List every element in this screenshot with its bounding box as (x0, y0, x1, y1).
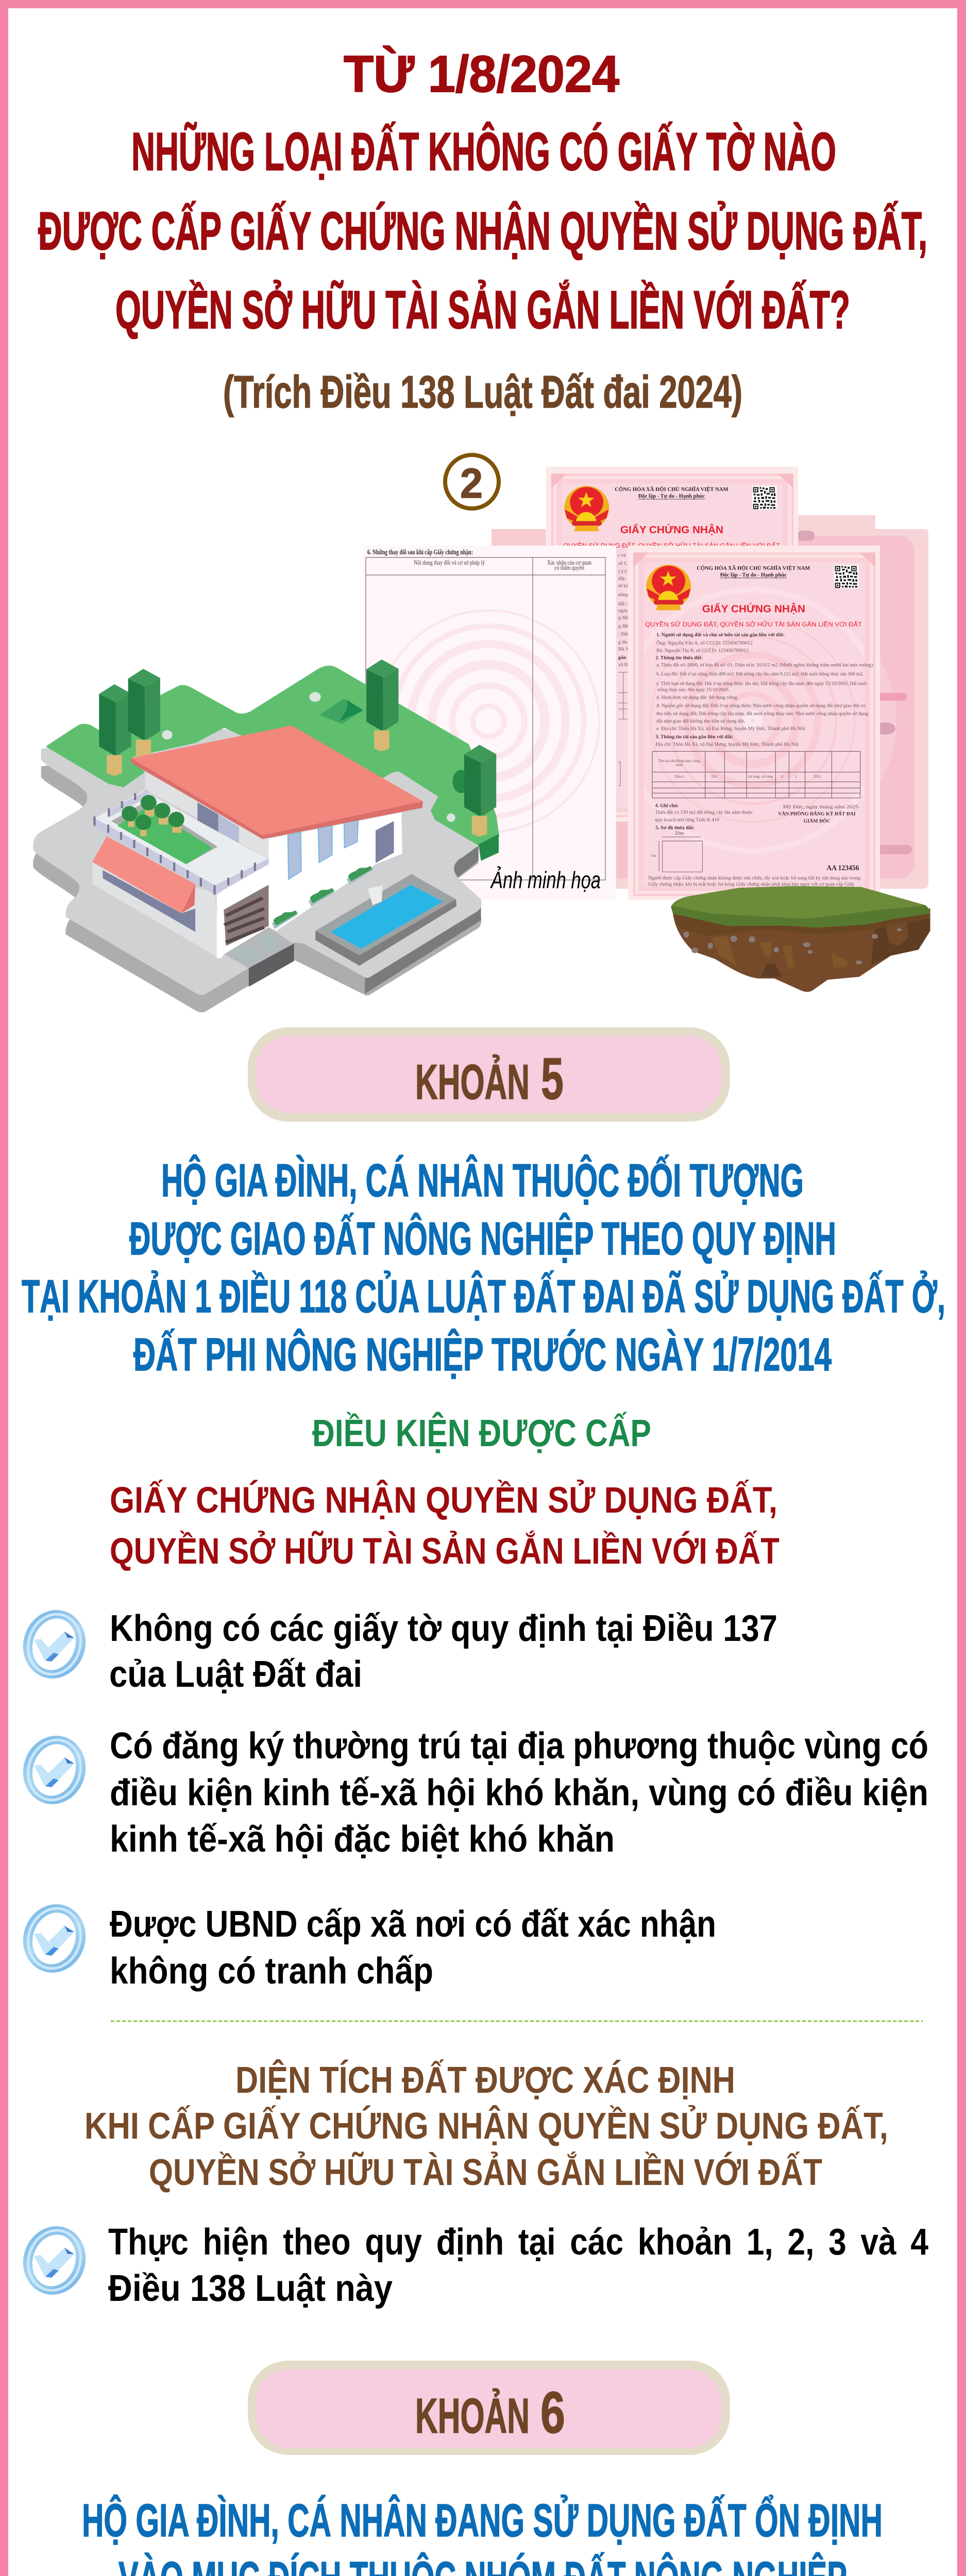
subheading: determined land area: QUYỀN SỞ HỮU TÀI SẢN GẮN LIỀN VỚI ĐẤT (149, 2151, 822, 2193)
illustration: soil island (671, 886, 930, 992)
illustration: land use right certificate: trình (676, 763, 683, 767)
illustration: land use right certificate: Ông: Nguyễn Văn A, số CCCD: 123456789012 (656, 640, 753, 646)
illustration: land use right certificate: Thửa đất có 150 m2 đất trồng cây lâu năm thuộc (655, 810, 753, 816)
illustration: land use right certificate: bê tông, cốt thép (749, 775, 773, 779)
illustration: land use right certificate: 150 (711, 775, 717, 779)
illustration: certificate back copy (546, 467, 798, 822)
condition 1: của Luật Đất đai (109, 1654, 362, 1695)
section badge: khoản 6: KHOẢN (415, 2388, 530, 2444)
illustration: certificate back copy: QUYỀN SỬ DỤNG ĐẤT, QUYỀN SỞ HỮU TÀI SẢN GẮN LIỀN VỚI ĐẤT (563, 541, 780, 549)
illustration: land use right certificate: c. Thời hạn sử dụng đất: Đất ở tại nông thôn: lâu dài; Đất trồng cây lâu năm: đến ngày 15/10/2043; Đất nuôi (656, 681, 867, 686)
condition 3 (14, 1896, 716, 1992)
part number badge: 2 (460, 460, 483, 507)
caption: illustrative image: Ảnh minh họa (490, 866, 601, 893)
illustration: land use right certificate: 2. Thông tin thửa đất: (655, 655, 703, 661)
illustration: certificate back copy: t và (618, 553, 626, 558)
illustration: land use right certificate: 4 (781, 775, 783, 779)
illustration: land use right certificate: 5. Sơ đồ thửa đất: (655, 825, 694, 831)
illustration: certificate back copy: đất: Đ (618, 601, 631, 607)
subtitle: source: (Trích Điều 138 Luật Đất đai 2024) (223, 366, 742, 417)
lawn (46, 666, 499, 861)
illustration: certificate back copy: g đất (618, 623, 629, 629)
icon: check mark (14, 1896, 94, 1981)
swimming pool (315, 874, 456, 965)
illustration: land use right certificate: GIẤY CHỨNG NHẬN (702, 602, 805, 615)
illustration: pink document pile behind (492, 515, 928, 889)
illustration: certificate back copy: xã Đ (618, 662, 628, 668)
illustration: land use right certificate: 5m (651, 854, 656, 858)
illustration: certificate back copy: ngày 1 (618, 608, 632, 614)
illustration: land use right certificate: b. Loại đất: Đất ở tại nông thôn 400 m2; Đất trồng cây lâu năm 9.112 m2; Đất nuôi trồng thủy sản 500 m2. (656, 671, 863, 677)
section badge: khoản 5 (248, 1027, 730, 1122)
illustration: certificate back copy: CCC (618, 569, 629, 574)
condition 3: không có tranh chấp (110, 1951, 433, 1992)
illustration: land use right certificate: đất như giao đất không thu tiền sử dụng đất. (656, 719, 745, 724)
subheading: certificate: QUYỀN SỞ HỮU TÀI SẢN GẮN LIỀN VỚI ĐẤT (110, 1531, 779, 1572)
illustration: land use right certificate: a. Thửa đất số: 0000, tờ bản đồ số: 01; Diện tích: 10.012 m2 (Mười nghìn không trăm mười hai mét vuông) (656, 662, 873, 668)
heading: subjects of clause 6 (82, 2494, 883, 2576)
icon: check mark (14, 1727, 94, 1812)
illustration: certificate back copy: Hà Xã (618, 647, 632, 652)
illustration: certificate back page with table (363, 546, 616, 899)
illustration: land use right certificate: 1. Người sử dụng đất và chủ sở hữu tài sản gắn liền với đất: (656, 632, 785, 638)
illustration: land use right certificate (622, 546, 883, 900)
watermark drum (378, 611, 599, 832)
condition 1: Không có các giấy tờ quy định tại Điều 137 (110, 1608, 777, 1649)
land area rule (14, 2218, 928, 2309)
subheading: certificate: GIẤY CHỨNG NHẬN QUYỀN SỬ DỤNG ĐẤT, (110, 1480, 777, 1521)
illustration: certificate back page with table: 6. Những thay đổi sau khi cấp Giấy chứng nhận: (367, 549, 473, 556)
illustration: certificate back copy: g đất: (618, 615, 630, 620)
illustration: land use right certificate: GIÁM ĐỐC (804, 817, 831, 824)
illustration: certificate back copy: số C (618, 561, 628, 567)
house front (217, 812, 402, 958)
illustration: certificate back copy: tờ bả (618, 583, 629, 589)
illustration: land use right certificate: d. Hình thức sử dụng đất: Sử dụng riêng. (656, 695, 738, 701)
subheading: certificate (110, 1480, 779, 1572)
illustration: land use right certificate: trồng thủy sản: đến ngày 15/10/2043. (657, 687, 729, 693)
icon: check mark (14, 1602, 94, 1687)
title: TỪ 1/8/2024 (344, 45, 619, 103)
subheading: conditions: ĐIỀU KIỆN ĐƯỢC CẤP (312, 1412, 651, 1454)
trees (99, 659, 496, 837)
icon: check mark (14, 2218, 94, 2303)
condition 2 (14, 1725, 928, 1860)
illustration: land use right certificate: Bà: Nguyễn Thị B, số CCCD: 123456789012 (656, 648, 749, 653)
garden bushes and stepping stones (224, 866, 372, 968)
illustration: certificate back copy: Độc lập - Tự do - Hạnh phúc (638, 493, 705, 499)
illustration: land use right certificate: Độc lập - Tự do - Hạnh phúc (720, 572, 787, 578)
illustration: land use right certificate: thu tiền sử dụng đất; Đất trồng cây lâu năm, đất nuôi trồng thủy sản: Nhà nước công nhận quyền sử dụng (656, 711, 868, 717)
illustration: certificate back page with table: Nội dung thay đổi và cơ sở pháp lý (414, 558, 485, 566)
condition 1 (14, 1602, 777, 1695)
illustration: land use right certificate: Nhà ở (675, 775, 684, 779)
illustration: land use right certificate: Tên tài sản/Hạng mục công (658, 759, 700, 763)
illustration: certificate back copy: GIẤY CHỨNG NHẬN (620, 523, 723, 536)
illustration: land use right certificate: 2021 (814, 775, 821, 779)
terrace garden (94, 790, 268, 894)
illustration: certificate back copy: g thu (618, 639, 629, 645)
heading: subjects of clause 5 (22, 1154, 945, 1381)
section badge: khoản 6 (248, 2361, 730, 2455)
illustration: land use right certificate: Người được cấp Giấy chứng nhận không được sửa chữa, tẩy xóa hoặc bổ sung bất kỳ nội dung nào trong (648, 875, 860, 881)
illustration: certificate back copy: gắn li (618, 655, 631, 660)
part number badge (445, 455, 499, 509)
watermark drum (650, 617, 855, 823)
condition 3: Được UBND cấp xã nơi có đất xác nhận (110, 1904, 716, 1945)
illustration: certificate back page with table: có thẩm quyền (554, 564, 584, 571)
illustration: land use right certificate: e. Địa chỉ: Thôn Hà Xá, xã Đại Hưng, huyện Mỹ Đức, Thành phố Hà Nội (656, 726, 805, 732)
illustration: land use right certificate: quy hoạch mở rộng Tỉnh lộ 419 (655, 817, 719, 823)
condition 2: kinh tế-xã hội đặc biệt khó khăn (110, 1819, 615, 1860)
illustration: certificate back copy: CỘNG HÒA XÃ HỘI CHỦ NGHĨA VIỆT NAM (615, 486, 728, 493)
section badge: khoản 5: 5 (541, 1046, 564, 1112)
illustration: certificate back copy: đất: (618, 576, 626, 582)
roof (131, 725, 423, 839)
illustration: land use right certificate: VĂN PHÒNG ĐĂNG KÝ ĐẤT ĐAI (778, 810, 856, 817)
illustration: land use right certificate: Mỹ Đức, ngày tháng năm 2025 (783, 804, 858, 810)
illustration: land use right certificate: đ. Nguồn gốc sử dụng đất: Đất ở tại nông thôn: Nhà nước công nhận quyền sử dụng đất như giao đất có (656, 703, 866, 709)
illustration: certificate back copy: : Đất (618, 632, 629, 637)
land area rule: Điều 138 Luật này (108, 2268, 393, 2309)
ground slab (33, 729, 481, 1012)
upper floor wall (145, 772, 268, 859)
section badge: khoản 5: KHOẢN (415, 1054, 530, 1110)
illustration: land use right certificate: AA 123456 (826, 864, 859, 872)
section badge: khoản 6: 6 (540, 2380, 565, 2446)
subheading: determined land area (84, 2059, 888, 2193)
table: asset details (652, 751, 860, 798)
illustration: land use right certificate: Địa chỉ: Thôn Hà Xá, xã Đại Hưng, huyện Mỹ Đức, Thành phố Hà Nội (655, 742, 799, 748)
illustration: land use right certificate: QUYỀN SỬ DỤNG ĐẤT, QUYỀN SỞ HỮU TÀI SẢN GẮN LIỀN VỚI ĐẤT (645, 620, 862, 628)
illustration: land use right certificate: CỘNG HÒA XÃ HỘI CHỦ NGHĨA VIỆT NAM (697, 565, 810, 571)
illustration: certificate back page with table: Xác nhận của cơ quan (547, 558, 591, 566)
title (38, 45, 927, 340)
subheading: determined land area: DIỆN TÍCH ĐẤT ĐƯỢC XÁC ĐỊNH (235, 2059, 735, 2101)
left wall and awning (92, 836, 218, 958)
illustration: land use right certificate: 20m (675, 831, 684, 836)
illustration: certificate back copy: nông (618, 592, 629, 598)
illustration: land use right certificate: 2 (795, 775, 797, 779)
illustration: land use right certificate: Giấy chứng nhận; khi bị mất hoặc hư hỏng Giấy chứng nhận phải khai báo ngay với cơ quan cấp Giấy (648, 882, 854, 887)
illustration: land use right certificate: 3. Thông tin tài sản gắn liền với đất: (655, 734, 733, 740)
illustration: land use right certificate: 4. Ghi chú: (655, 803, 679, 809)
illustration: isometric house (33, 659, 499, 1012)
